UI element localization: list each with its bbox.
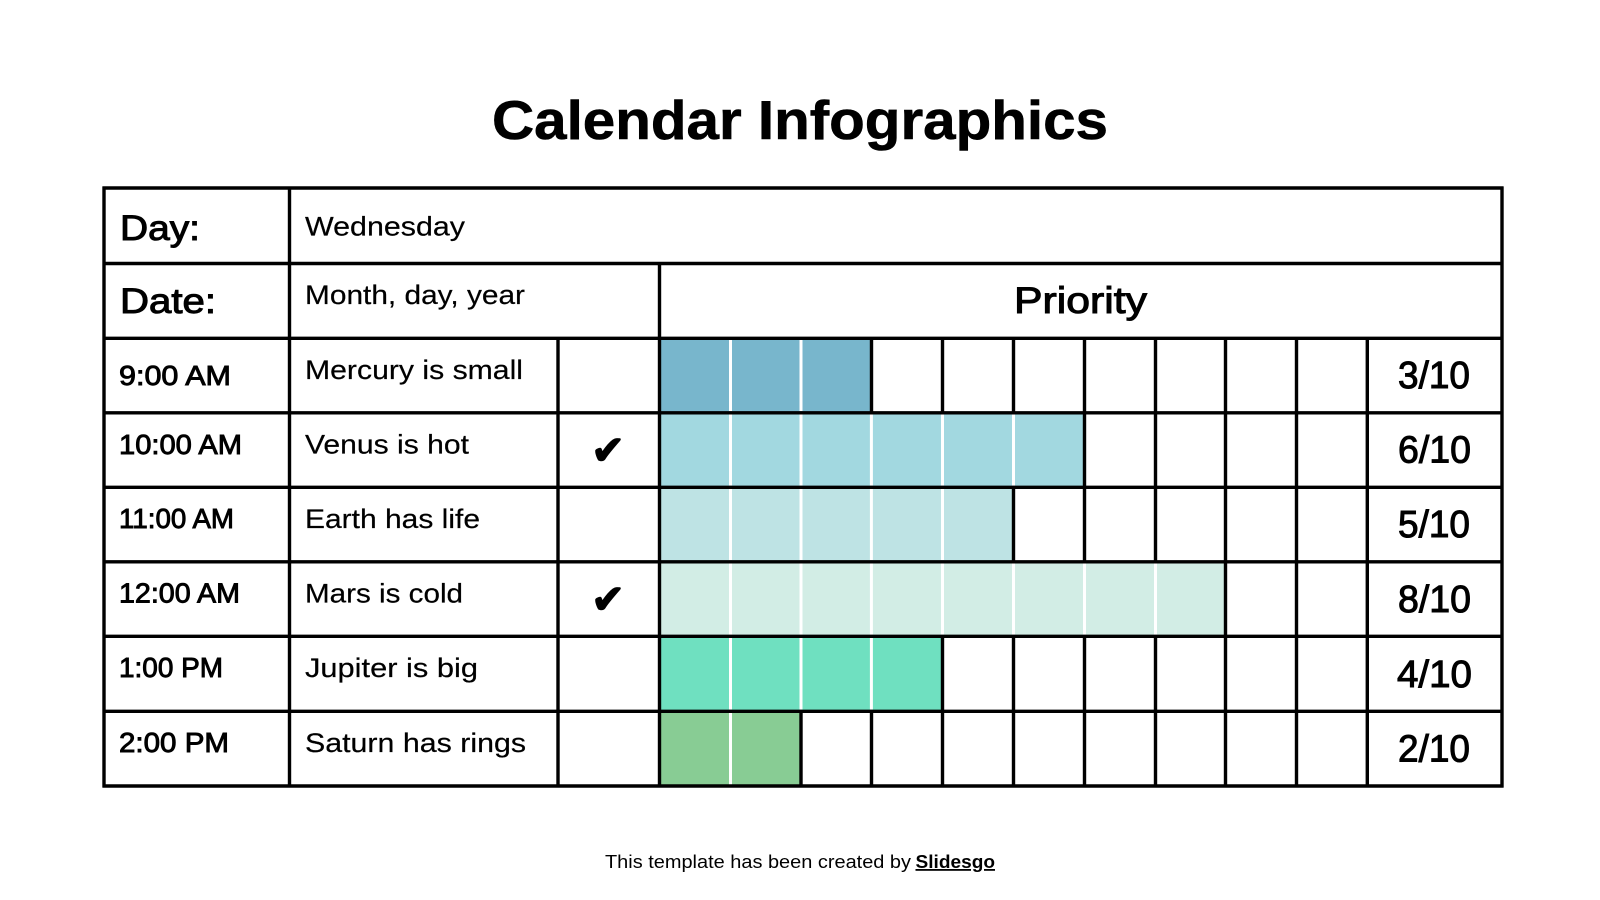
row labels: times: 1:00 PM (119, 652, 223, 683)
bar: Mercury 3/10 (659, 338, 871, 412)
priority scores (1397, 355, 1472, 770)
priority scores: 2/10 (1398, 728, 1470, 770)
row labels: times: 10:00 AM (119, 429, 242, 460)
header value: date: Month, day, year (305, 280, 525, 310)
row labels: tasks: Mars is cold (305, 578, 463, 608)
bar: Jupiter 4/10 (659, 636, 942, 711)
check marks: ✔ (591, 428, 625, 474)
title: Calendar Infographics (492, 89, 1108, 151)
row labels: tasks: Venus is hot (305, 430, 470, 460)
row labels: tasks: Earth has life (305, 504, 480, 534)
footer credit: Slidesgo (916, 852, 995, 872)
bar: Earth 5/10 (659, 487, 1013, 562)
check marks: ✔ (591, 577, 625, 623)
row labels: times: 11:00 AM (119, 503, 234, 534)
check marks (591, 428, 625, 623)
row labels: tasks: Saturn has rings (305, 728, 526, 758)
row labels: times: 12:00 AM (119, 578, 240, 608)
priority scores: 8/10 (1398, 579, 1471, 621)
grid lines (102, 186, 1504, 788)
bar: Mars 8/10 (659, 562, 1225, 636)
priority scores: 6/10 (1398, 430, 1471, 472)
row labels: times: 2:00 PM (119, 727, 229, 758)
priority bars (659, 338, 1225, 786)
header label: Day: Day: (120, 209, 200, 248)
priority scores: 4/10 (1397, 654, 1472, 696)
row labels: tasks: Jupiter is big (305, 653, 478, 683)
header value: Wednesday: Wednesday (305, 212, 466, 242)
header label: Date: Date: (120, 282, 216, 321)
footer credit: This template has been created by (605, 852, 911, 872)
bar: Saturn 2/10 (659, 711, 801, 786)
bar: Venus 6/10 (659, 412, 1084, 487)
row labels: times (119, 360, 242, 758)
calendar table (102, 186, 1504, 788)
row labels: tasks (305, 355, 526, 758)
row labels: tasks: Mercury is small (305, 355, 523, 385)
row labels: times: 9:00 AM (119, 360, 231, 391)
priority scores: 3/10 (1398, 355, 1470, 397)
priority scores: 5/10 (1398, 504, 1470, 546)
bar cell separators (730, 340, 1156, 784)
column heading: Priority: Priority (1014, 280, 1148, 321)
